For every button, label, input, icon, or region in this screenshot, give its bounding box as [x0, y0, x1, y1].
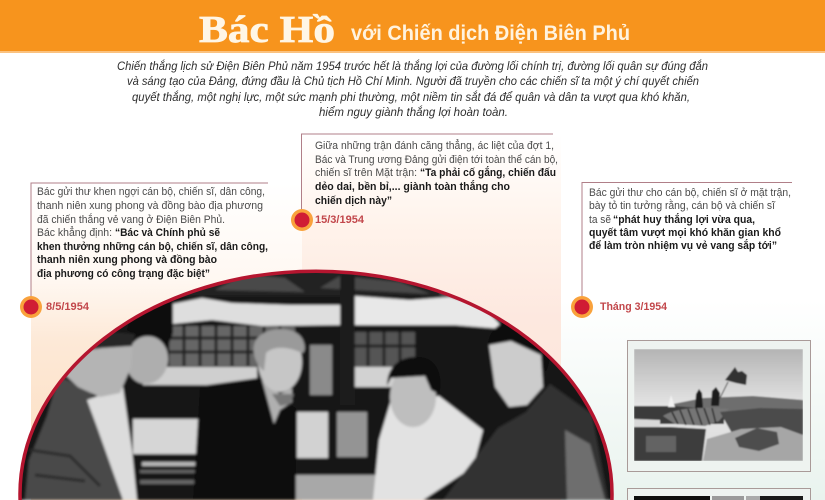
text: 8/5/1954 letter: Bác khẳng định: [37, 226, 112, 239]
text: March 1954 letter [589, 187, 791, 252]
text: March 1954 letter: quyết tâm vượt mọi khó khăn gian khổ [589, 227, 782, 239]
man 4 face [489, 341, 543, 407]
small lights [142, 462, 202, 466]
text: 15/3/1954 telegram: chiến dịch này” [315, 195, 392, 207]
text: 15/3/1954 telegram [315, 139, 558, 207]
text: 8/5/1954 letter [37, 186, 268, 280]
text: 8/5/1954 letter: địa phương có công trạng đặc biệt” [37, 268, 210, 280]
photo card: second archive photo [628, 488, 810, 500]
flagpole [720, 382, 728, 398]
left man jacket [25, 376, 129, 500]
text: 8/5/1954 letter: đã chiến thắng vẻ vang ở Điện Biên Phủ. [37, 213, 225, 226]
intro paragraph: hiểm nguy giành thắng lợi hoàn toàn. [319, 104, 508, 119]
subtitle: với Chiến dịch Điện Biên Phủ [351, 22, 630, 45]
marker dot [291, 209, 313, 231]
white tent [668, 395, 675, 407]
post [338, 275, 356, 328]
bright band [172, 298, 342, 326]
man 3 face [390, 367, 436, 427]
intro paragraph: Chiến thắng lịch sử Điện Biên Phủ năm 1954 trước hết là thắng lợi của đường lối chính trị, đường lối quân sự đúng đắn [117, 58, 708, 73]
intro paragraph: và sáng tạo của Đảng, đứng đầu là Chủ tịch Hồ Chí Minh. Người đã truyền cho các chiến sĩ ta một ý chí quyết chiến [127, 74, 699, 88]
timeline item: 8/5/1954 [20, 183, 268, 318]
text: 8/5/1954 letter: khen thưởng những cán bộ, chiến sĩ, dân công, [37, 241, 268, 253]
text: 8/5/1954 letter: “Bác và Chính phủ sẽ [115, 227, 220, 239]
text: 15/3/1954 telegram: Giữa những trận đánh căng thẳng, ác liệt của đợt 1, [315, 139, 554, 152]
text: March 1954 letter: bày tỏ tin tưởng rằng, cán bộ và chiến sĩ [589, 199, 776, 212]
marker dot [571, 296, 593, 318]
intro paragraph [117, 58, 708, 119]
lower ground [634, 427, 706, 461]
date: 15/3/1954 [315, 214, 364, 226]
text: 8/5/1954 letter: Bác gửi thư khen ngợi cán bộ, chiến sĩ, dân công, [37, 186, 265, 198]
text: 8/5/1954 letter: thanh niên xung phong và đồng bào [37, 254, 218, 266]
bunker [663, 408, 729, 426]
Ho Chi Minh coat [193, 378, 296, 500]
left man face [66, 344, 132, 398]
head [256, 346, 304, 394]
man 4 hair [488, 320, 550, 372]
text: March 1954 letter: ta sẽ [589, 214, 611, 226]
title banner [0, 0, 825, 53]
text: 8/5/1954 letter: thanh niên xung phong và đồng bào địa phương [37, 200, 263, 212]
text: 15/3/1954 telegram: dẻo dai, bền bỉ,... giành toàn thắng cho [315, 180, 511, 193]
marker dot [20, 296, 42, 318]
background panels [31, 135, 825, 500]
text: 15/3/1954 telegram: chiến sĩ trên Mặt trận: [315, 167, 417, 179]
window grid [160, 326, 295, 366]
horizon [673, 396, 803, 414]
timeline item: Tháng 3/1954 [571, 182, 792, 318]
white strip [634, 419, 660, 427]
table [278, 475, 378, 500]
man 2 hair [127, 303, 173, 349]
soldiers [695, 387, 720, 408]
roof [189, 273, 438, 296]
flag [725, 367, 747, 385]
oval main photo: leaders around a table [15, 268, 617, 500]
white wall [143, 367, 257, 385]
text: March 1954 letter: Bác gửi thư cho cán bộ, chiến sĩ ở mặt trận, [589, 187, 791, 199]
timeline item: 15/3/1954 [291, 134, 558, 231]
text: 15/3/1954 telegram: “Ta phải cố gắng, chiến đấu [420, 166, 556, 179]
neck [262, 380, 292, 424]
text: March 1954 letter: “phát huy thắng lợi vừa qua, [613, 213, 755, 226]
window panes [297, 412, 328, 458]
man 3 shirt [373, 396, 483, 500]
white shirt [87, 387, 137, 500]
date: Tháng 3/1954 [600, 301, 667, 313]
soil right [720, 408, 803, 435]
man 4 jacket [443, 384, 608, 500]
title: Bác Hồ: Bác Hồ [199, 9, 335, 51]
text: March 1954 letter: để làm tròn nhiệm vụ vẻ vang sắp tới” [589, 239, 777, 252]
man 2 face [128, 334, 170, 386]
date: 8/5/1954 [46, 301, 89, 313]
text: 15/3/1954 telegram: Bác và Trung ương Đảng gửi điện tới toàn thể cán bộ, [315, 154, 558, 166]
photo card: flag over the bunker [628, 340, 810, 472]
intro paragraph: quyết thắng, một nghị lực, một sức mạnh phi thường, một niềm tin sắt đá để quân và dân ta vượt qua khó khăn, [132, 89, 690, 104]
